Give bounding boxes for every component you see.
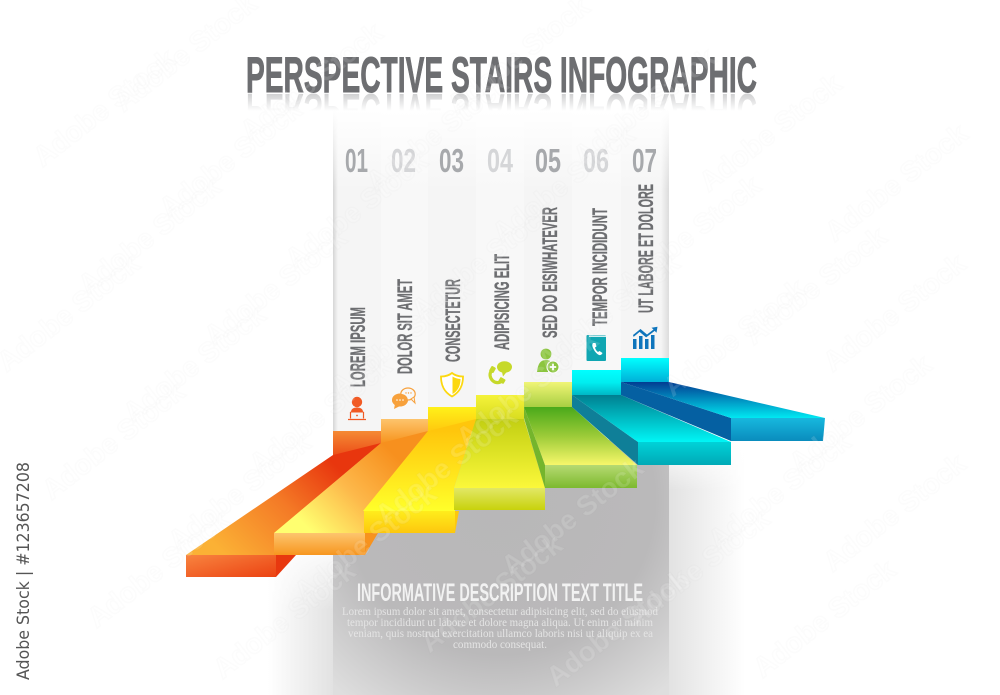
watermarks: Adobe Stock xyxy=(567,41,721,171)
description text: tempor incididunt ut labore et dolore magna aliqua. Ut enim ad minim xyxy=(347,617,653,629)
icon: shield xyxy=(441,373,463,396)
icon: person at laptop xyxy=(348,397,366,420)
watermarks: Adobe Stock xyxy=(279,144,433,274)
step 6 cyan xyxy=(572,370,731,465)
watermarks: Adobe Stock xyxy=(243,349,397,479)
watermarks: Adobe Stock xyxy=(27,42,181,172)
step labels: ADIPISICING ELIT xyxy=(491,254,514,350)
numbers xyxy=(345,142,657,179)
numbers: 04 xyxy=(487,142,513,179)
watermarks: Adobe Stock xyxy=(540,562,694,692)
watermarks: Adobe Stock xyxy=(817,247,971,377)
panel: upper column strip xyxy=(333,110,669,450)
watermarks: Adobe Stock xyxy=(495,451,649,581)
watermarks: Adobe Stock xyxy=(702,425,856,555)
step 4 lime yellow xyxy=(454,395,545,510)
watermarks: Adobe Stock xyxy=(162,426,316,556)
description text: Lorem ipsum dolor sit amet, consectetur adipisicing elit, sed do eiusmod xyxy=(342,606,658,618)
stairs xyxy=(186,358,825,577)
icon: add user xyxy=(537,349,559,373)
numbers: 05 xyxy=(535,142,561,179)
icon: phone and speech bubble xyxy=(489,361,512,384)
stock id label: Adobe Stock | #123657208 xyxy=(14,462,34,680)
icon: growth chart xyxy=(633,327,658,349)
numbers: 06 xyxy=(583,142,609,179)
numbers: 02 xyxy=(391,142,416,179)
watermarks: Adobe Stock xyxy=(207,554,361,684)
watermarks: Adobe Stock xyxy=(450,323,604,453)
numbers: 07 xyxy=(632,142,657,179)
step 5 green xyxy=(524,382,637,488)
step labels: CONSECTETUR xyxy=(442,279,465,362)
step labels: LOREM IPSUM xyxy=(347,307,370,387)
panel shadow left xyxy=(268,540,333,695)
step labels: TEMPOR INCIDIDUNT xyxy=(589,208,612,326)
watermarks: Adobe Stock xyxy=(817,447,971,577)
watermarks: Adobe Stock xyxy=(36,375,190,505)
watermarks: Adobe Stock xyxy=(198,221,352,351)
watermarks: Adobe Stock xyxy=(693,67,847,197)
panel: lower grey area xyxy=(333,440,669,695)
step 2 light orange xyxy=(274,419,428,555)
watermarks: Adobe Stock xyxy=(405,195,559,325)
description text: veniam, quis nostrud exercitation ullamco laboris nisi ut aliquip ex ea xyxy=(348,628,653,640)
watermarks: Adobe Stock xyxy=(486,118,640,248)
watermarks: Adobe Stock xyxy=(738,220,892,350)
watermarks: Adobe Stock xyxy=(414,528,568,658)
watermarks: Adobe Stock xyxy=(72,170,226,300)
watermarks: Adobe Stock xyxy=(369,400,523,530)
description text xyxy=(342,606,658,651)
step labels: SED DO EISIWHATEVER xyxy=(539,207,562,338)
step 7 blue xyxy=(621,358,825,441)
description title: INFORMATIVE DESCRIPTION TEXT TITLE xyxy=(357,579,643,607)
watermarks: Adobe Stock xyxy=(612,169,766,299)
numbers: 03 xyxy=(439,142,464,179)
watermarks: Adobe Stock xyxy=(621,502,775,632)
step 1 orange xyxy=(186,431,381,577)
watermarks: Adobe Stock xyxy=(81,503,235,633)
description text: commodo consequat. xyxy=(453,639,547,651)
watermarks: Adobe Stock xyxy=(657,272,811,402)
step labels xyxy=(347,184,658,387)
numbers: 01 xyxy=(345,142,368,179)
icon: chat bubbles xyxy=(392,388,415,409)
watermarks: Adobe Stock xyxy=(360,67,514,197)
watermarks: Adobe Stock xyxy=(117,298,271,428)
watermarks: Adobe Stock xyxy=(819,117,973,247)
watermarks: Adobe Stock xyxy=(234,16,388,146)
icon: phone book xyxy=(586,335,606,361)
watermarks: Adobe Stock xyxy=(783,348,937,478)
step labels: UT LABORE ET DOLORE xyxy=(635,184,658,313)
watermarks: Adobe Stock xyxy=(747,553,901,683)
panel shadow right xyxy=(669,440,745,695)
watermarks: Adobe Stock xyxy=(324,272,478,402)
watermarks: Adobe Stock xyxy=(288,477,442,607)
step labels: DOLOR SIT AMET xyxy=(394,279,417,374)
step 3 yellow xyxy=(363,407,476,533)
watermarks: Adobe Stock xyxy=(531,246,685,376)
watermarks: Adobe Stock xyxy=(153,93,307,223)
